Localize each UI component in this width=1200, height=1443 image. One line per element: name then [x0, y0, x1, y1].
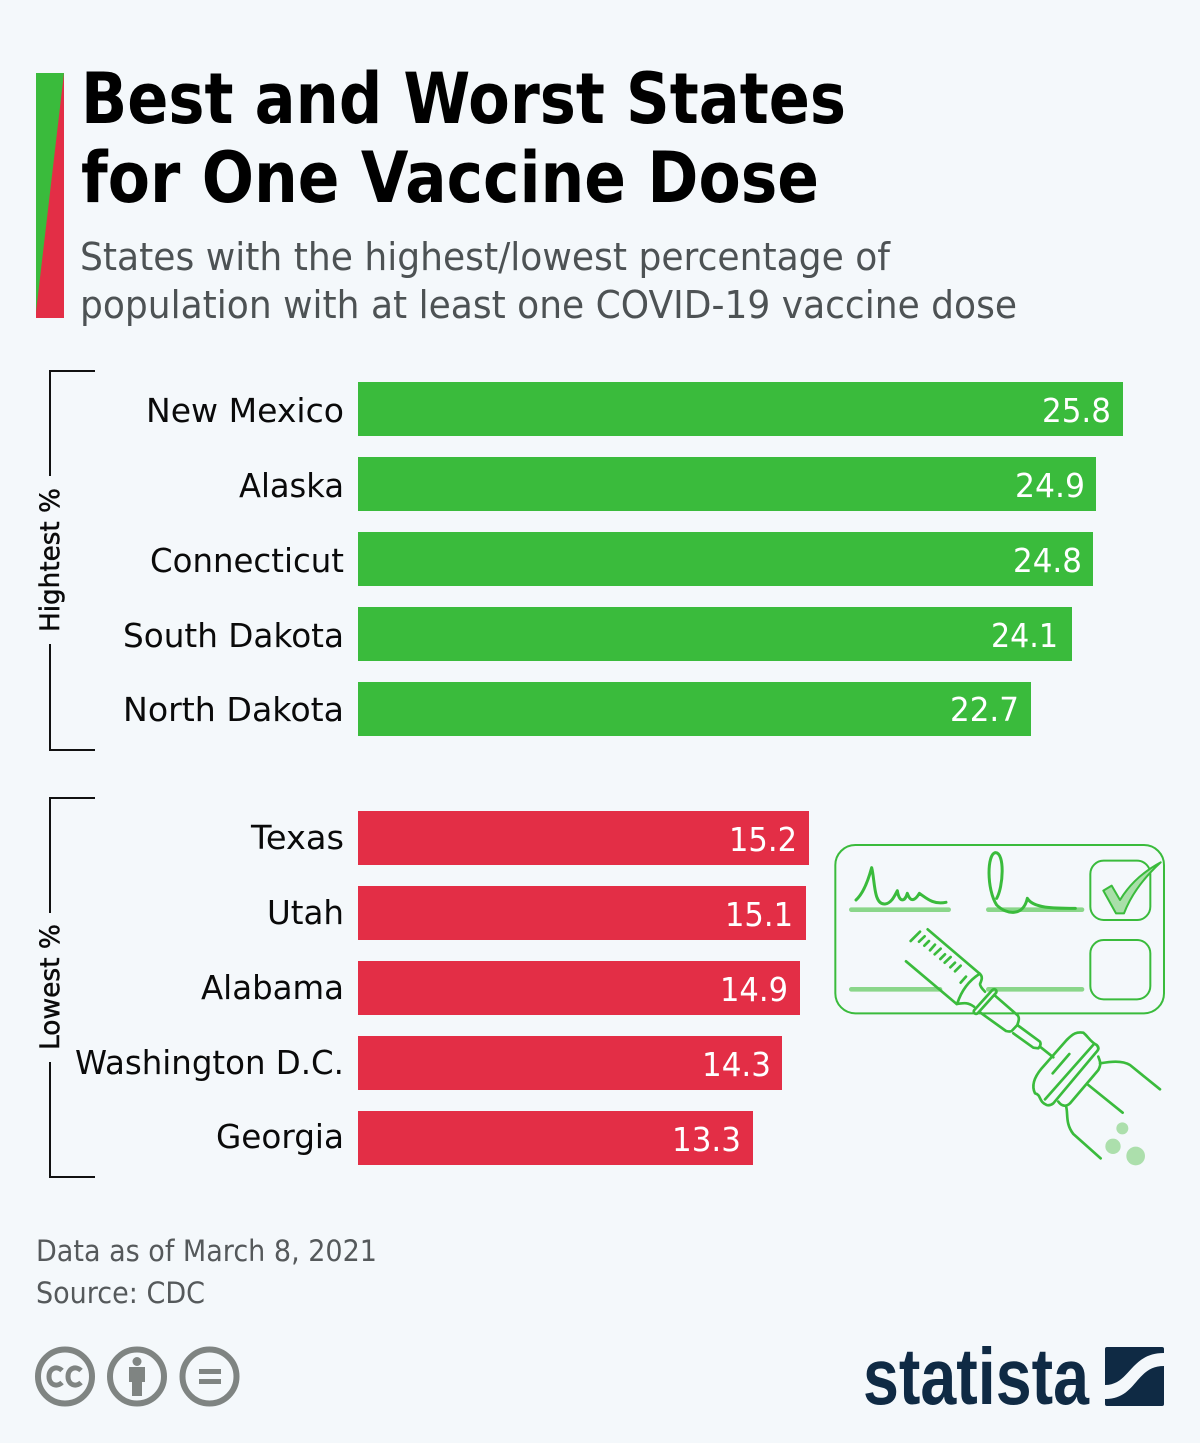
icon: title accent bar [36, 73, 64, 318]
bar: South Dakota: South Dakota [123, 616, 344, 655]
bar: Texas [250, 811, 809, 865]
bar: Alaska: Alaska [239, 466, 344, 505]
footnote and source [36, 1234, 377, 1310]
bar: North Dakota: 22.7 [950, 690, 1019, 729]
bar chart: highest percentage states [123, 382, 1123, 736]
bar: Alabama [201, 961, 800, 1015]
bar: Washington D.C.: 14.3 [702, 1045, 771, 1084]
bar: Connecticut: Connecticut [150, 541, 344, 580]
bar: Utah: Utah [267, 893, 344, 932]
title [81, 58, 846, 219]
bar: Texas: 15.2 [729, 820, 797, 859]
bar: North Dakota [123, 682, 1031, 736]
bar: Georgia: 13.3 [672, 1120, 741, 1159]
logo: statista: statista [863, 1332, 1089, 1421]
bar: Georgia: Georgia [216, 1117, 344, 1156]
bar: South Dakota: 24.1 [991, 616, 1058, 655]
subtitle [80, 235, 1017, 327]
title: Best and Worst States [81, 58, 846, 140]
bar: Alaska: 24.9 [1015, 466, 1085, 505]
bracket: lowest group: Lowest % [35, 924, 66, 1050]
bar: South Dakota [123, 607, 1072, 661]
illustration: vaccination card and syringe [835, 845, 1164, 1165]
subtitle: States with the highest/lowest percentage of [80, 235, 892, 279]
bar: Texas: Texas [250, 818, 344, 857]
bar: Alabama: 14.9 [720, 970, 788, 1009]
icon: creative commons licence badges [38, 1350, 236, 1404]
subtitle: population with at least one COVID-19 vaccine dose [80, 283, 1017, 327]
bracket: lowest group [35, 798, 95, 1177]
bar: Washington D.C.: Washington D.C. [75, 1043, 344, 1082]
bar: New Mexico: New Mexico [146, 391, 344, 430]
bracket: highest group: Hightest % [35, 488, 66, 632]
bar chart: lowest percentage states [75, 811, 809, 1165]
bar: Utah: 15.1 [725, 895, 793, 934]
bar: New Mexico [146, 382, 1123, 436]
footnote and source: Source: CDC [36, 1276, 205, 1310]
bar: Alabama: Alabama [201, 968, 344, 1007]
footnote and source: Data as of March 8, 2021 [36, 1234, 377, 1268]
bar: Connecticut [150, 532, 1093, 586]
bar: Utah [267, 886, 806, 940]
bar: Connecticut: 24.8 [1013, 541, 1082, 580]
bar: Alaska [239, 457, 1096, 511]
bar: New Mexico: 25.8 [1042, 391, 1111, 430]
bar: Washington D.C. [75, 1036, 782, 1090]
bracket: highest group [35, 371, 95, 750]
bar: Georgia [216, 1111, 753, 1165]
title: for One Vaccine Dose [81, 137, 819, 219]
bar: North Dakota: North Dakota [123, 690, 344, 729]
